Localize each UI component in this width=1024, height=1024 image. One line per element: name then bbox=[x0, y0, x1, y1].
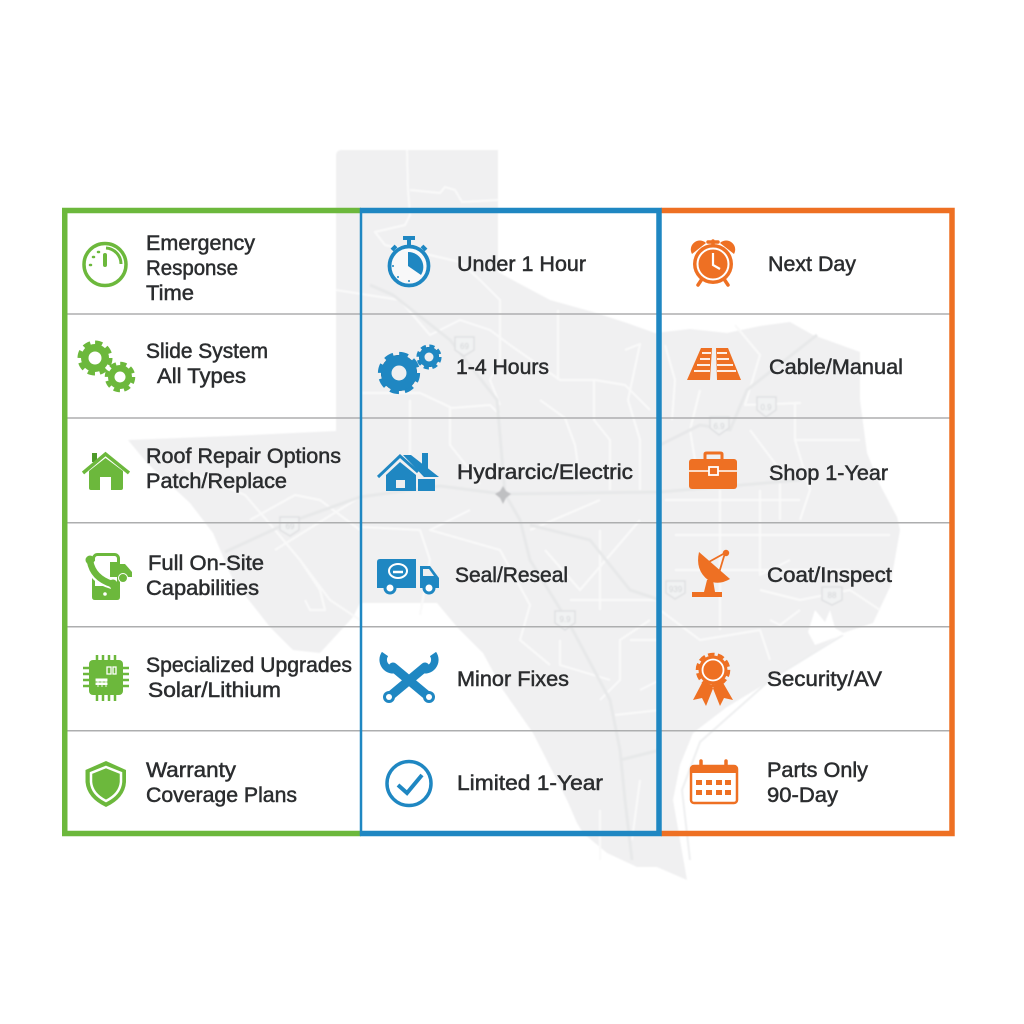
icon: satellite dish bbox=[692, 550, 730, 597]
icon: house bbox=[378, 453, 439, 491]
icon: house bbox=[83, 453, 129, 490]
label: Roof Repair Options Patch/Replace: Patch/Replace bbox=[146, 470, 287, 493]
panel: blue column bbox=[360, 208, 659, 836]
label: Specialized Upgrades Solar/Lithium: Specialized Upgrades bbox=[146, 654, 352, 677]
icon: crossed wrenches bbox=[383, 654, 435, 703]
row: slide system bbox=[80, 340, 268, 390]
label: Specialized Upgrades Solar/Lithium bbox=[146, 654, 352, 702]
row dividers bbox=[66, 314, 950, 731]
icon: gauge bbox=[84, 244, 126, 286]
label: Full On-Site Capabilities: Full On-Site bbox=[148, 552, 264, 575]
label: Limited 1-Year: Limited 1-Year bbox=[457, 772, 603, 795]
route shields: 88 bbox=[828, 591, 837, 600]
icon: shield bbox=[86, 761, 126, 807]
route shields: 939 bbox=[669, 585, 683, 594]
label: Parts Only 90-Day: 90-Day bbox=[767, 784, 839, 807]
icon: gears bbox=[380, 346, 440, 392]
row: emergency response time bbox=[84, 232, 256, 305]
label: Parts Only 90-Day bbox=[767, 759, 869, 807]
label: Minor Fixes: Minor Fixes bbox=[457, 668, 569, 691]
label: Roof Repair Options Patch/Replace bbox=[146, 445, 341, 493]
row: seal/reseal bbox=[377, 559, 568, 593]
icon: slide rails bbox=[687, 348, 741, 380]
label: Security/AV: Security/AV bbox=[767, 668, 882, 691]
route shields: 0.9 bbox=[760, 403, 772, 412]
row: parts only bbox=[691, 759, 869, 807]
row: on-site capabilities bbox=[86, 552, 264, 600]
icon: toolbox bbox=[689, 453, 737, 489]
row: cable/manual bbox=[687, 348, 903, 380]
label: Full On-Site Capabilities bbox=[146, 552, 264, 600]
row: under 1 hour bbox=[390, 236, 586, 286]
label: Under 1 Hour: Under 1 Hour bbox=[457, 253, 586, 276]
label: Cable/Manual: Cable/Manual bbox=[769, 356, 903, 379]
label: Seal/Reseal: Seal/Reseal bbox=[455, 564, 568, 587]
route shields: 69 bbox=[460, 342, 469, 351]
label: Parts Only 90-Day: Parts Only bbox=[767, 759, 869, 782]
row: hydraulic/electric bbox=[378, 453, 633, 491]
row: shop 1-year bbox=[689, 453, 888, 489]
background map: Texas bbox=[128, 150, 900, 880]
label: Hydrarcic/Electric: Hydrarcic/Electric bbox=[457, 461, 633, 484]
label: Full On-Site Capabilities: Capabilities bbox=[146, 577, 259, 600]
label: Slide System All Types bbox=[146, 340, 268, 388]
label: Warranty Coverage Plans bbox=[146, 759, 297, 807]
label: 1-4 Hours: 1-4 Hours bbox=[456, 356, 549, 379]
label: Slide System All Types: All Types bbox=[157, 365, 246, 388]
label: Coat/Inspect: Coat/Inspect bbox=[767, 564, 892, 587]
icon: award rosette bbox=[693, 654, 733, 706]
icon: service truck bbox=[377, 559, 439, 593]
route shields bbox=[280, 337, 842, 630]
row: limited 1-year bbox=[387, 762, 603, 806]
row: roof repair bbox=[83, 445, 341, 493]
label: Emergency Response Time bbox=[146, 232, 256, 305]
label: Roof Repair Options Patch/Replace: Roof Repair Options bbox=[146, 445, 341, 468]
label: Specialized Upgrades Solar/Lithium: Solar/Lithium bbox=[148, 679, 281, 702]
icon: chip bbox=[83, 655, 129, 701]
route shields: 6.9 bbox=[713, 422, 725, 431]
route shields: 69 bbox=[286, 522, 295, 531]
row: specialized upgrades bbox=[83, 654, 352, 702]
panel: orange column bbox=[661, 210, 952, 834]
row: coat/inspect bbox=[692, 550, 892, 597]
label: Emergency Response Time: Time bbox=[146, 282, 194, 305]
row: warranty bbox=[86, 759, 297, 807]
row: next day bbox=[691, 241, 857, 285]
label: Slide System All Types: Slide System bbox=[146, 340, 268, 363]
label: Shop 1-Year: Shop 1-Year bbox=[769, 462, 888, 485]
label: Emergency Response Time: Response bbox=[146, 257, 238, 280]
row: minor fixes bbox=[383, 654, 569, 703]
icon: gears bbox=[80, 342, 134, 390]
label: Next Day: Next Day bbox=[768, 253, 857, 276]
row: 1-4 hours bbox=[380, 346, 549, 392]
icon: alarm clock bbox=[691, 241, 735, 285]
label: Warranty Coverage Plans: Warranty bbox=[146, 759, 237, 782]
row: security/av bbox=[693, 654, 882, 706]
icon: calendar bbox=[691, 761, 737, 803]
coastal barrier line bbox=[682, 635, 843, 860]
icon: phone and truck bbox=[86, 554, 132, 600]
icon: stopwatch bbox=[390, 236, 428, 286]
route shields: 9.9 bbox=[559, 615, 571, 624]
panel: green column bbox=[65, 210, 361, 834]
icon: check circle bbox=[387, 762, 431, 806]
label: Emergency Response Time: Emergency bbox=[146, 232, 256, 255]
label: Warranty Coverage Plans: Coverage Plans bbox=[146, 784, 297, 807]
